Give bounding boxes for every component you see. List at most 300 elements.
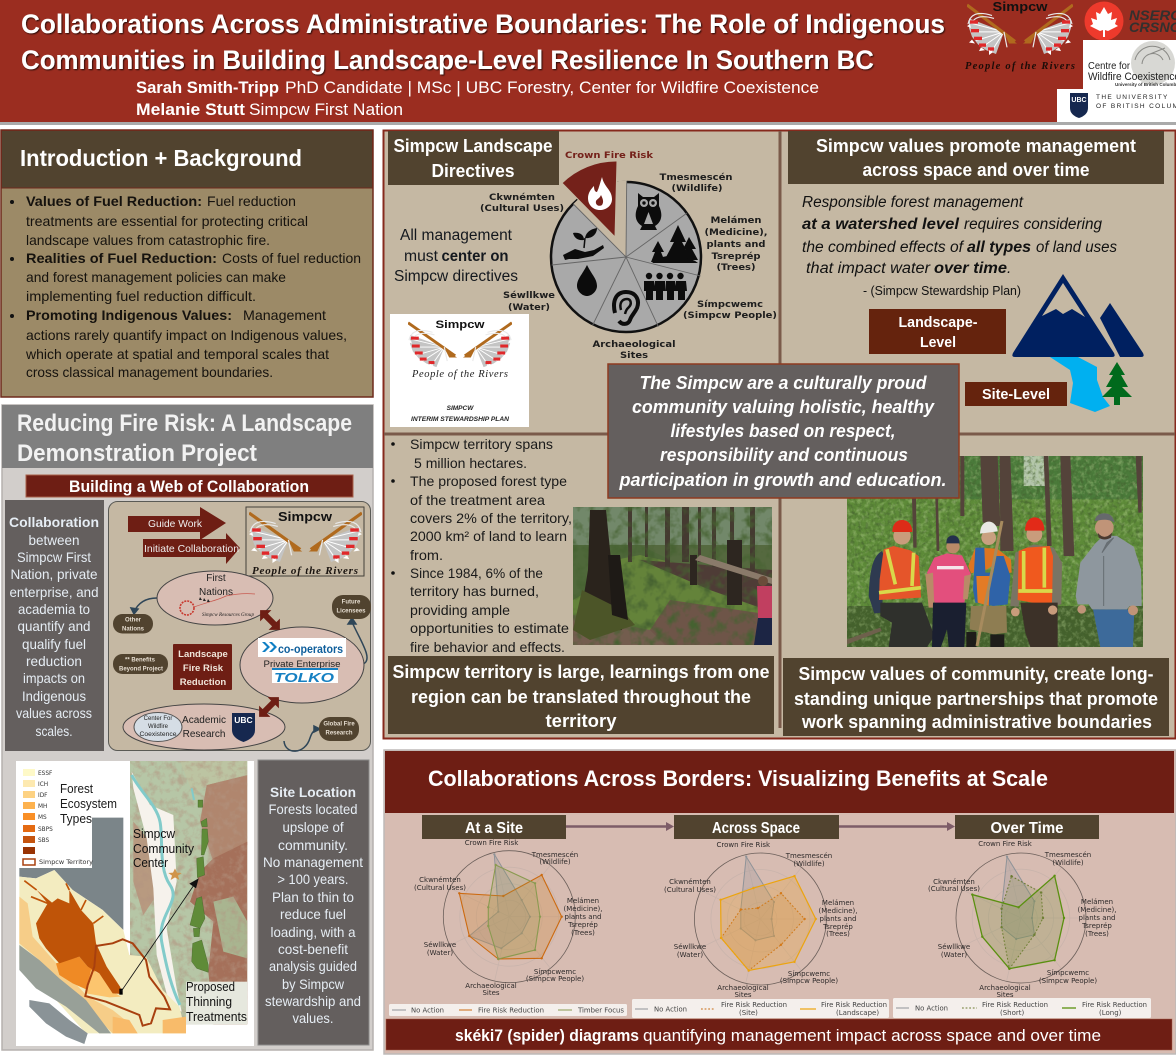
text block: site location: community. — [278, 837, 348, 853]
panel: right column upper frame — [384, 130, 1176, 738]
spider chart: over time: (Water) — [941, 951, 967, 959]
person 4 — [1010, 544, 1062, 607]
spider chart: at a site: (Medicine), — [564, 905, 602, 913]
spider chart: at a site — [414, 839, 602, 997]
pie labels: Séwllkwe — [503, 290, 555, 301]
spider chart: across space: (Wildlife) — [793, 860, 825, 868]
heading: landscape directives: Simpcw Landscape — [394, 136, 552, 156]
title: Collaborations Across Administrative Boundaries: The Role of Indigenous — [21, 9, 945, 39]
map legend: IDF — [38, 793, 48, 799]
spider chart: at a site: Ckwnémten — [419, 876, 461, 884]
legend: at a site: Fire Risk Reduction — [478, 1006, 544, 1014]
spider chart: at a site: Tmesmescén — [531, 851, 578, 859]
text block: site location: values. — [292, 1010, 334, 1026]
map legend: SBPS — [38, 827, 53, 833]
pills: outcomes: ** Benefits — [125, 658, 156, 664]
spider chart: over time: Tmesmescén — [1044, 851, 1091, 859]
quote: stewardship plan: Responsible forest management — [802, 194, 1024, 211]
spider chart: at a site: (Trees) — [571, 929, 595, 937]
pie labels: (Water) — [508, 303, 550, 313]
diagram: web of collaboration — [108, 502, 371, 751]
spider chart: at a site: (Water) — [427, 949, 453, 957]
map legend: ESSF — [38, 771, 52, 777]
intro bullets: treatments are essential for protecting critical — [26, 213, 308, 229]
spider chart: over time: plants and — [1079, 914, 1115, 922]
text: territory bullets: from. — [410, 547, 443, 563]
spider chart: at a site: Símpcwemc — [534, 968, 576, 976]
text block: site location: Site Location — [270, 784, 356, 800]
legend: over time: No Action — [915, 1004, 948, 1012]
text block: collaboration: scales. — [36, 723, 72, 739]
quote: stewardship plan: all types — [967, 239, 1031, 256]
arrow: initiate collaboration: Initiate Collaboration — [144, 543, 239, 555]
map legend: MH — [38, 804, 47, 810]
intro bullets: cross classical management boundaries. — [26, 364, 273, 380]
arrow: first nations to private enterprise — [254, 604, 286, 636]
heading: reducing fire risk — [2, 405, 373, 468]
callout: culturally proud community — [608, 364, 959, 498]
authors: Simpcw First Nation — [249, 100, 403, 119]
intro bullets: and forest management policies can make — [26, 269, 286, 285]
legend: at a site: No Action — [411, 1006, 444, 1014]
callout: territory learning: region can be translated throughout the — [411, 687, 751, 707]
node: Academic Research: UBC — [234, 715, 253, 725]
legend: at a site: Timber Focus — [577, 1006, 624, 1014]
icon: owl — [636, 193, 661, 230]
pie labels: Tsreprép — [712, 251, 761, 262]
pie labels: Archaeological — [592, 340, 676, 350]
text block: site location: cost-benefit — [278, 941, 348, 957]
spider chart: at a site: Tsreprép — [567, 921, 598, 929]
callout: culturally proud community: responsibility and continuous — [660, 445, 908, 465]
text: territory bullets — [391, 436, 572, 655]
label: site-level — [965, 382, 1067, 406]
callout: community partnerships — [783, 658, 1169, 736]
legend: across space: (Site) — [739, 1009, 758, 1017]
label: at a site — [422, 815, 566, 839]
arrow: guide work — [128, 507, 226, 540]
spider chart: across space: Símpcwemc — [788, 970, 830, 978]
label: landscape-level — [869, 309, 1006, 354]
spider chart: over time: (Cultural Uses) — [928, 885, 980, 893]
node: First Nations — [157, 571, 273, 625]
title — [21, 9, 945, 75]
node: Academic Research: Coexistence — [140, 732, 177, 738]
person 1 — [869, 551, 884, 613]
text block: site location: Forests located — [268, 801, 358, 817]
spider chart: over time — [928, 840, 1116, 999]
node: First Nations: First — [206, 573, 226, 584]
callout: landscape fire risk reduction: Reduction — [180, 677, 226, 688]
intro bullets: Management — [243, 307, 326, 323]
legend: across space — [632, 999, 889, 1018]
text block: site location: upslope of — [282, 819, 344, 835]
text block: site location: No management — [263, 854, 363, 870]
map panel: forest ecosystem types — [16, 761, 254, 1046]
callout: culturally proud community: community valuing holistic, healthy — [632, 397, 935, 417]
icon: mountains, river and tree — [1012, 274, 1144, 412]
legend: at a site — [389, 1004, 627, 1016]
authors: PhD Candidate | MSc | UBC Forestry, Center for Wildfire Coexistence — [285, 78, 819, 97]
text block: collaboration: qualify fuel — [22, 636, 86, 652]
pie labels: Crown Fire Risk — [565, 151, 654, 161]
text block: collaboration: Simpcw First — [17, 549, 91, 565]
text block: site location: by Simpcw — [282, 976, 345, 992]
caption: spider diagrams — [386, 1019, 1172, 1050]
title: Communities in Building Landscape-Level Resilience In Southern BC — [21, 45, 874, 75]
text block: site location: analysis guided — [269, 958, 357, 974]
callout: landscape fire risk reduction: Fire Risk — [183, 663, 224, 674]
pills: outcomes: Research — [325, 730, 353, 736]
spider chart: at a site: Crown Fire Risk — [465, 839, 519, 847]
spider chart: over time: Símpcwemc — [1047, 969, 1089, 977]
authors: Sarah Smith-Tripp — [136, 78, 279, 97]
heading: landscape directives: Directives — [432, 161, 514, 181]
spider chart: across space: Tmesmescén — [785, 852, 832, 860]
caption: spider diagrams: skéki7 (spider) diagrams — [455, 1026, 639, 1045]
callout: culturally proud community: participation in growth and education. — [618, 470, 946, 490]
quote: stewardship plan: the combined effects of — [802, 239, 965, 256]
callout: community partnerships: standing unique partnerships that promote — [794, 689, 1158, 709]
spider chart: across space: Melámen — [822, 899, 854, 907]
pie labels: Ckwnémten — [489, 192, 555, 203]
pie labels: (Simpcw People) — [683, 311, 777, 321]
quote: stewardship plan: of land uses — [1036, 239, 1117, 256]
node: Academic Research: Research — [183, 729, 225, 740]
callout: culturally proud community: lifestyles based on respect, — [670, 421, 896, 441]
intro bullets: which operate at spatial and temporal scales that — [25, 346, 329, 362]
label: over time — [955, 815, 1099, 839]
map label: proposed treatments: Thinning — [186, 994, 232, 1009]
map label: community center: Simpcw — [133, 826, 176, 841]
intro bullets: Values of Fuel Reduction: — [26, 193, 202, 209]
heading: reducing fire risk: Reducing Fire Risk: A Landscape — [17, 410, 352, 437]
logo: interim stewardship plan: SIMPCW — [447, 405, 474, 412]
spider chart: at a site: (Wildlife) — [539, 858, 571, 866]
pills: outcomes — [113, 595, 371, 741]
spider chart: over time: Séwllkwe — [938, 943, 970, 951]
intro bullets: landscape values from catastrophic fire. — [26, 232, 270, 248]
sub-heading: building a web of collaboration: Building a Web of Collaboration — [69, 477, 309, 496]
label: across space: Across Space — [712, 820, 800, 837]
spider chart: over time: Archaeological — [979, 984, 1031, 992]
text block: site location — [258, 760, 369, 1045]
legend: over time: (Short) — [1000, 1009, 1025, 1017]
spider chart: across space: plants and — [820, 915, 856, 923]
spider chart: over time: Ckwnémten — [933, 878, 975, 886]
logo: Simpcw in diagram: Simpcw — [278, 509, 333, 524]
text block: site location: reduce fuel — [280, 906, 346, 922]
spider chart: at a site: Séwllkwe — [424, 941, 456, 949]
spider chart: across space: Séwllkwe — [674, 943, 706, 951]
node: Academic Research — [123, 704, 285, 750]
map legend: Simpcw Territory — [39, 860, 94, 866]
icon: water drop — [577, 265, 597, 296]
quote: stewardship plan: at a watershed level — [802, 216, 960, 233]
text: territory bullets: Since 1984, 6% of the — [410, 565, 543, 581]
legend: over time: Fire Risk Reduction — [982, 1001, 1048, 1009]
spider chart: across space: (Cultural Uses) — [664, 886, 716, 894]
pie labels: (Wildlife) — [672, 184, 722, 194]
spider chart: over time: Tsreprép — [1081, 922, 1112, 930]
spider chart: over time: (Trees) — [1085, 930, 1109, 938]
spider chart: across space: (Medicine), — [819, 907, 857, 915]
photo: project team — [847, 456, 1143, 647]
text block: collaboration: reduction — [26, 653, 82, 669]
panel: introduction and background — [1, 130, 373, 397]
quote: stewardship plan: requires considering — [964, 216, 1102, 233]
spider chart: across space: Tsreprép — [822, 923, 853, 931]
caption: spider diagrams: quantifying management impact across space and over time — [643, 1026, 1101, 1045]
sub-heading: building a web of collaboration — [26, 475, 353, 497]
text: territory bullets: The proposed forest type — [410, 473, 567, 489]
person 2 — [927, 553, 971, 605]
spider chart: at a site: plants and — [565, 913, 601, 921]
quote: stewardship plan: that impact water — [806, 260, 931, 277]
logo: interim stewardship plan: People of the Rivers — [411, 369, 508, 380]
text: territory bullets: 2000 km² of land to learn — [410, 528, 567, 544]
intro bullets: Costs of fuel reduction — [222, 250, 361, 266]
intro bullets: Fuel reduction — [207, 193, 296, 209]
spider chart: over time: Crown Fire Risk — [978, 840, 1033, 848]
text block: collaboration: impacts on — [23, 670, 85, 686]
node: Private Enterprise — [240, 627, 364, 703]
map legend: ICH — [38, 782, 48, 788]
callout: community partnerships: work spanning administrative boundaries — [801, 712, 1152, 732]
spider chart: over time: Melámen — [1081, 898, 1113, 906]
spider chart: across space: Archaeological — [717, 984, 769, 992]
legend: over time: Fire Risk Reduction — [1082, 1001, 1147, 1009]
heading: introduction: Introduction + Background — [20, 145, 302, 171]
label: over time: Over Time — [990, 820, 1064, 837]
logo: Centre for Wildfire Coexistence — [1083, 40, 1176, 90]
label: at a site: At a Site — [465, 820, 523, 837]
label: landscape-level: Landscape- — [898, 315, 978, 331]
heading: collaborations across borders: Collaborations Across Borders: Visualizing Benefits at Scale — [428, 766, 1048, 791]
icon: hand with plant — [563, 228, 604, 260]
text: territory bullets: providing ample — [410, 602, 510, 618]
text block: collaboration: Nation, private — [10, 566, 98, 582]
legend: over time — [893, 998, 1151, 1018]
intro bullets: Realities of Fuel Reduction: — [26, 250, 217, 266]
legend: across space: Fire Risk Reduction — [721, 1001, 787, 1009]
node: Academic Research: Wildfire — [148, 724, 169, 730]
legend: over time: (Long) — [1099, 1009, 1122, 1017]
spider chart: over time: Sites — [996, 991, 1014, 999]
logo: interim stewardship plan — [390, 314, 529, 427]
spider chart: over time: (Simpcw People) — [1039, 977, 1097, 985]
map label: proposed treatments: Proposed — [186, 979, 235, 994]
callout: territory learning: Simpcw territory is large, learnings from one — [392, 662, 770, 682]
pie labels: (Cultural Uses) — [480, 204, 564, 214]
pills: outcomes: Global Fire — [323, 722, 355, 728]
legend: across space: No Action — [654, 1006, 687, 1014]
map legend: MS — [38, 815, 47, 821]
pie labels: Sites — [620, 351, 648, 361]
text: territory bullets: opportunities to estimate — [410, 620, 569, 636]
map title — [60, 781, 117, 826]
photo: burned forest — [573, 507, 772, 645]
text block: site location: > 100 years. — [278, 871, 348, 887]
spider chart: across space: (Trees) — [826, 930, 850, 938]
text: all management must center: must — [404, 248, 439, 265]
text: territory bullets: of the treatment area — [410, 492, 545, 508]
logo: UBC — [1057, 89, 1176, 122]
wedge: crown fire risk — [562, 161, 617, 237]
spider chart: over time: (Wildlife) — [1052, 859, 1084, 867]
node: Private Enterprise: Private Enterprise — [264, 659, 340, 670]
text block: collaboration: academia to — [18, 601, 90, 617]
logo: Simpcw in diagram — [246, 507, 364, 577]
arrow: private enterprise to academic research — [253, 691, 285, 723]
pie labels: Melámen — [710, 216, 762, 226]
map: regional thinning site — [130, 761, 247, 1024]
panel: collaborations across borders — [384, 750, 1176, 1054]
map label: proposed treatments — [186, 979, 247, 1024]
pie chart: landscape directives — [480, 151, 777, 361]
node: First Nations: Simpcw Resources Group — [202, 613, 254, 618]
intro bullets — [10, 193, 361, 380]
spider chart: at a site: Sites — [482, 989, 500, 997]
intro bullets: implementing fuel reduction difficult. — [26, 288, 256, 304]
text block: collaboration: values across — [16, 705, 92, 721]
pie labels: (Trees) — [716, 263, 756, 273]
text block: collaboration — [5, 500, 104, 751]
map label: proposed treatments: Treatments — [186, 1009, 247, 1024]
arrow: site to space — [566, 822, 674, 831]
callout: territory learning — [388, 656, 774, 734]
text: territory bullets: territory has burned, — [410, 583, 539, 599]
text block: collaboration: enterprise, and — [10, 584, 98, 600]
text block: site location: stewardship and — [265, 993, 361, 1009]
map title: Ecosystem — [60, 796, 117, 811]
pills: outcomes: Other — [125, 618, 142, 624]
pills: outcomes: Licensees — [336, 608, 366, 614]
node: Academic Research: Academic — [182, 715, 226, 726]
node: Private Enterprise: co-operators — [278, 644, 343, 656]
quote: stewardship plan: . — [1007, 260, 1011, 277]
text: territory bullets: 5 million hectares. — [414, 455, 527, 471]
callout: landscape fire risk reduction — [173, 644, 232, 690]
logo: Centre for Wildfire Coexistence: Centre for — [1088, 60, 1130, 72]
map legend: SBS — [38, 838, 50, 844]
map label: community center — [133, 826, 194, 870]
logo: interim stewardship plan: Simpcw — [436, 319, 485, 331]
intro bullets: actions rarely quantify impact on Indigenous values, — [26, 327, 347, 343]
spider chart: across space: Sites — [734, 991, 752, 999]
pie labels: plants and — [706, 240, 766, 250]
spider chart: across space: (Water) — [677, 951, 703, 959]
quote: stewardship plan: over time — [934, 260, 1007, 277]
panel: reducing fire risk — [2, 405, 373, 1050]
icon: people — [644, 273, 687, 300]
node: Private Enterprise: TOLKO — [274, 670, 334, 685]
text block: collaboration: Collaboration — [9, 514, 99, 530]
person 5 — [1093, 609, 1134, 647]
text: territory bullets: fire behavior and effects. — [410, 639, 565, 655]
arrow: guide work: Guide Work — [148, 518, 203, 530]
logo: Simpcw in header: People of the Rivers — [965, 61, 1075, 72]
pie labels: Tmesmescén — [660, 172, 732, 183]
spider chart: across space: Crown Fire Risk — [717, 841, 771, 849]
heading: reducing fire risk: Demonstration Project — [17, 440, 257, 467]
callout: landscape fire risk reduction: Landscape — [178, 649, 228, 660]
curved arrows — [131, 598, 367, 751]
map label: community center: Center — [133, 855, 169, 870]
text block: site location: Plan to thin to — [272, 889, 354, 905]
pie labels — [480, 151, 777, 361]
spider chart: across space — [664, 841, 857, 999]
callout: community partnerships: Simpcw values of community, create long- — [798, 664, 1154, 684]
quote: stewardship plan: - (Simpcw Stewardship Plan) — [863, 284, 1021, 298]
logo: UBC: THE UNIVERSITY — [1096, 94, 1169, 101]
spider chart: at a site: Melámen — [567, 897, 599, 905]
heading: values promote management — [788, 131, 1164, 184]
text: all management must center: Simpcw directives — [394, 268, 518, 285]
callout: territory learning: territory — [546, 711, 616, 731]
pills: outcomes: Beyond Project — [119, 666, 163, 672]
heading: values promote management: across space and over time — [862, 160, 1090, 180]
icon: ear — [614, 292, 638, 324]
text block: collaboration: between — [28, 532, 80, 548]
legend: across space: Fire Risk Reduction — [821, 1001, 887, 1009]
text: all management must center: center on — [442, 248, 508, 265]
text: all management must center — [394, 227, 518, 285]
logo: Simpcw in header — [965, 0, 1075, 72]
map label: community center: Community — [133, 841, 194, 856]
text: territory bullets: covers 2% of the territory, — [410, 510, 572, 526]
map: British Columbia — [19, 818, 199, 1044]
node: First Nations: Nations — [199, 587, 233, 598]
text block: collaboration: quantify and — [18, 618, 90, 634]
text block: site location: loading, with a — [270, 924, 356, 940]
spider chart: across space: Ckwnémten — [669, 878, 711, 886]
heading: introduction — [2, 130, 372, 188]
label: site-level: Site-Level — [982, 387, 1050, 403]
logo: NSERC — [1084, 2, 1176, 40]
map legend — [23, 769, 94, 866]
arrow: initiate collaboration — [143, 533, 240, 564]
authors: Melanie Stutt — [136, 100, 245, 119]
legend: across space: (Landscape) — [836, 1009, 879, 1017]
label: landscape-level: Level — [920, 335, 956, 351]
logo: UBC: UBC — [1071, 97, 1087, 104]
text: all management must center: All management — [400, 227, 513, 244]
spider chart: at a site: (Cultural Uses) — [414, 884, 466, 892]
spider chart: at a site: (Simpcw People) — [526, 975, 584, 983]
intro bullets: Promoting Indigenous Values: — [26, 307, 232, 323]
icon: trees — [651, 225, 698, 263]
node: Academic Research: Center For — [144, 716, 172, 722]
map title: Forest — [60, 781, 93, 796]
spider chart: across space: (Simpcw People) — [780, 977, 838, 985]
heading: values promote management: Simpcw values promote management — [816, 136, 1136, 156]
pie labels: Símpcwemc — [697, 300, 763, 310]
logo: interim stewardship plan: INTERIM STEWARDSHIP PLAN — [411, 416, 509, 423]
text block: collaboration: Indigenous — [22, 688, 86, 704]
text: territory bullets: Simpcw territory spans — [410, 436, 553, 452]
pills: outcomes: Nations — [122, 626, 145, 632]
spider chart: at a site: Archaeological — [465, 982, 517, 990]
authors — [136, 78, 819, 119]
arrow: space to time — [839, 822, 955, 831]
pie labels: (Medicine), — [704, 228, 768, 238]
logo: Simpcw in diagram: People of the Rivers — [252, 565, 358, 577]
heading: collaborations across borders — [385, 751, 1174, 813]
spider chart: over time: (Medicine), — [1078, 906, 1116, 914]
pills: outcomes: Future — [342, 600, 361, 606]
quote: stewardship plan — [802, 194, 1117, 298]
